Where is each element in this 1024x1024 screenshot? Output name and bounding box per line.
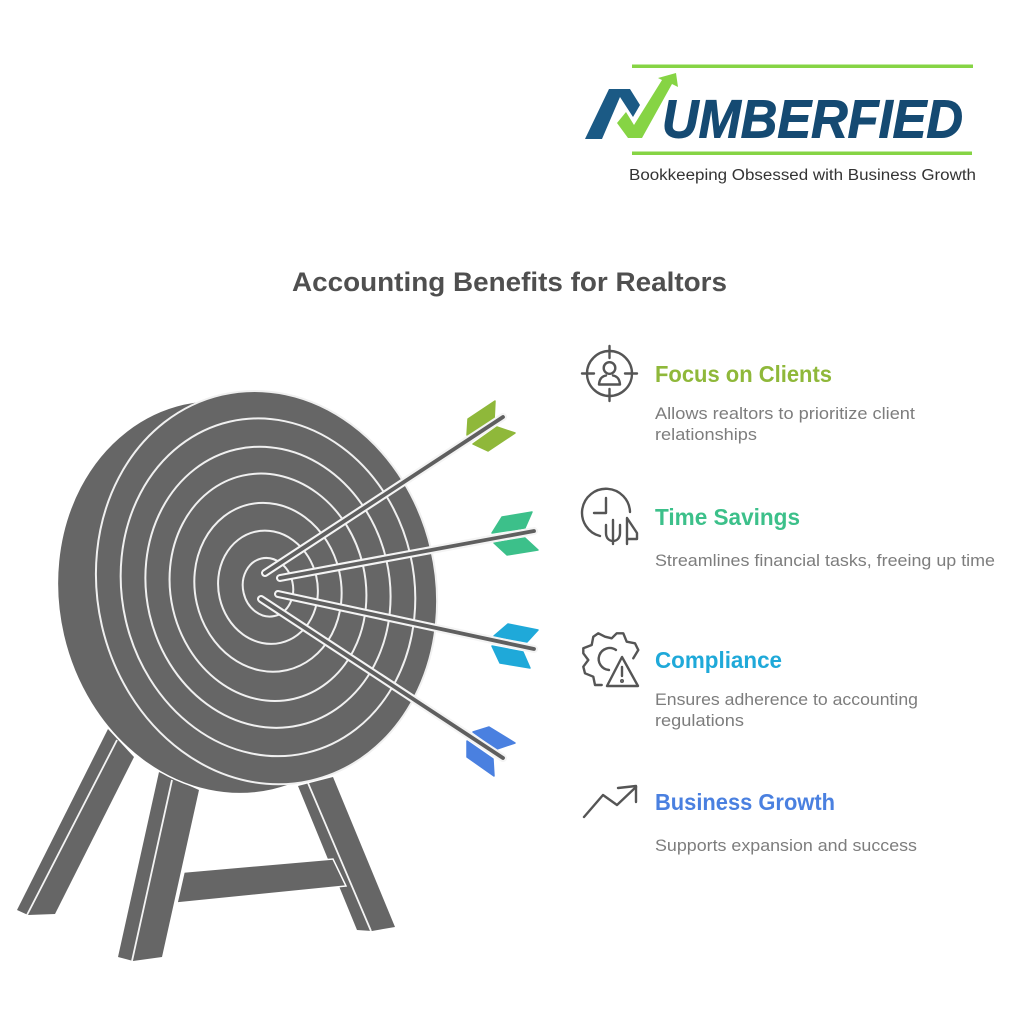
heading: Time Savings [655, 504, 800, 530]
heading: Business Growth [655, 789, 835, 815]
target face rings [57, 357, 476, 819]
panel: focus on clients [582, 346, 915, 444]
logo mark: green growth arrow [617, 73, 678, 138]
icon: gear with warning triangle [583, 633, 638, 686]
panel: compliance [583, 633, 918, 730]
arrow: green [265, 401, 515, 573]
heading: Focus on Clients [655, 361, 832, 387]
description: Streamlines financial tasks, freeing up time [655, 551, 995, 570]
description: Supports expansion and success [655, 836, 917, 855]
panel: focus on clients: relationships [655, 425, 757, 444]
logo: Numberfied [585, 64, 976, 184]
panel: time savings [582, 489, 995, 570]
arrow: teal [280, 512, 538, 578]
title: Accounting Benefits for Realtors [292, 267, 727, 297]
archery target illustration [17, 357, 538, 961]
description: Allows realtors to prioritize client [655, 404, 915, 423]
heading: Compliance [655, 647, 782, 673]
logo wordmark: UMBERFIED [662, 90, 963, 150]
target back disc [19, 366, 437, 828]
panel: compliance: regulations [655, 711, 744, 730]
logo tagline: Bookkeeping Obsessed with Business Growth [629, 167, 976, 184]
arrow: cyan [278, 594, 538, 668]
arrow: blue [261, 599, 515, 776]
icon: trend arrow [584, 786, 636, 817]
icon: clock with plant [582, 489, 637, 544]
logo mark: blue N stroke [585, 89, 640, 139]
panel: business growth [584, 786, 917, 855]
description: Ensures adherence to accounting [655, 690, 918, 709]
target stand legs [17, 729, 395, 961]
icon: person in crosshair [582, 346, 637, 401]
